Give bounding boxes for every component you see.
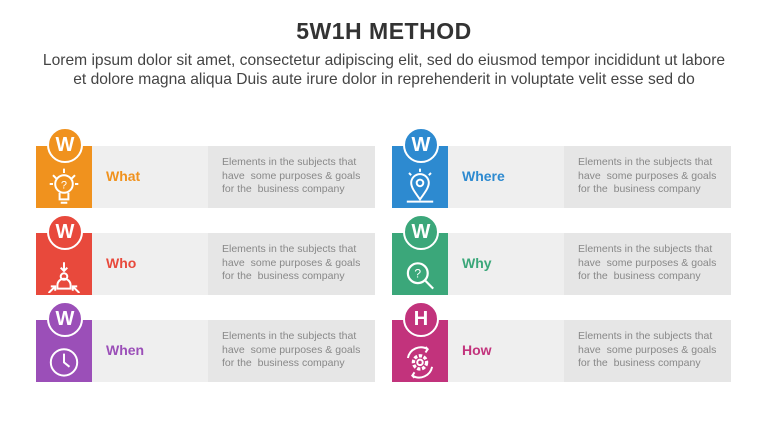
panel: how: Elements in the subjects that [578, 330, 712, 342]
text: H [414, 308, 428, 330]
panel: what [36, 129, 375, 208]
icon: lightbulb [50, 168, 78, 204]
panel: why: for the business company [578, 270, 701, 282]
panel: how: for the business company [578, 357, 701, 369]
panel: when [36, 303, 375, 382]
panel: what: for the business company [222, 183, 345, 195]
subtitle text [43, 52, 725, 88]
icon: gear cycle [407, 346, 433, 379]
icon: lightbulb: ? [61, 179, 67, 191]
panel: where: have some purposes & goals [578, 170, 716, 182]
panel: why: have some purposes & goals [578, 256, 716, 268]
icon: location pin [406, 168, 434, 203]
text: W [56, 308, 74, 330]
title: 5W1H METHOD [296, 18, 472, 44]
icon: clock [50, 348, 78, 377]
panel: how: have some purposes & goals [578, 344, 716, 356]
panel: who: have some purposes & goals [222, 256, 360, 268]
panel: how: How [462, 342, 492, 358]
panel: who: Elements in the subjects that [222, 243, 356, 255]
panel: why [392, 216, 731, 295]
icon: magnifier question [406, 262, 434, 290]
text: W [56, 221, 74, 243]
panel: when: When [106, 342, 144, 358]
panel: how [392, 303, 731, 382]
panel: why: Elements in the subjects that [578, 243, 712, 255]
text: W [412, 134, 430, 156]
subtitle text: Lorem ipsum dolor sit amet, consectetur adipiscing elit, sed do eiusmod tempor incididunt ut labore [43, 52, 725, 69]
panel: what: What [106, 168, 140, 184]
panel: where: for the business company [578, 183, 701, 195]
panel: why: Why [462, 255, 492, 271]
panel: who: Who [106, 255, 136, 271]
panel: where: Where [462, 168, 505, 184]
panel: when: Elements in the subjects that [222, 330, 356, 342]
panel: when: have some purposes & goals [222, 344, 360, 356]
panel: where [392, 129, 731, 208]
panel: what: Elements in the subjects that [222, 156, 356, 168]
subtitle text: et dolore magna aliqua Duis aute irure dolor in reprehenderit in voluptate velit esse sed do [73, 71, 695, 88]
panel: when: for the business company [222, 357, 345, 369]
panel: who [36, 216, 375, 295]
text: W [56, 134, 74, 156]
panel: where: Elements in the subjects that [578, 156, 712, 168]
icon: magnifier question: ? [414, 267, 421, 281]
panel: what: have some purposes & goals [222, 170, 360, 182]
text: W [412, 221, 430, 243]
panel: who: for the business company [222, 270, 345, 282]
icon: person arrows [48, 262, 80, 293]
